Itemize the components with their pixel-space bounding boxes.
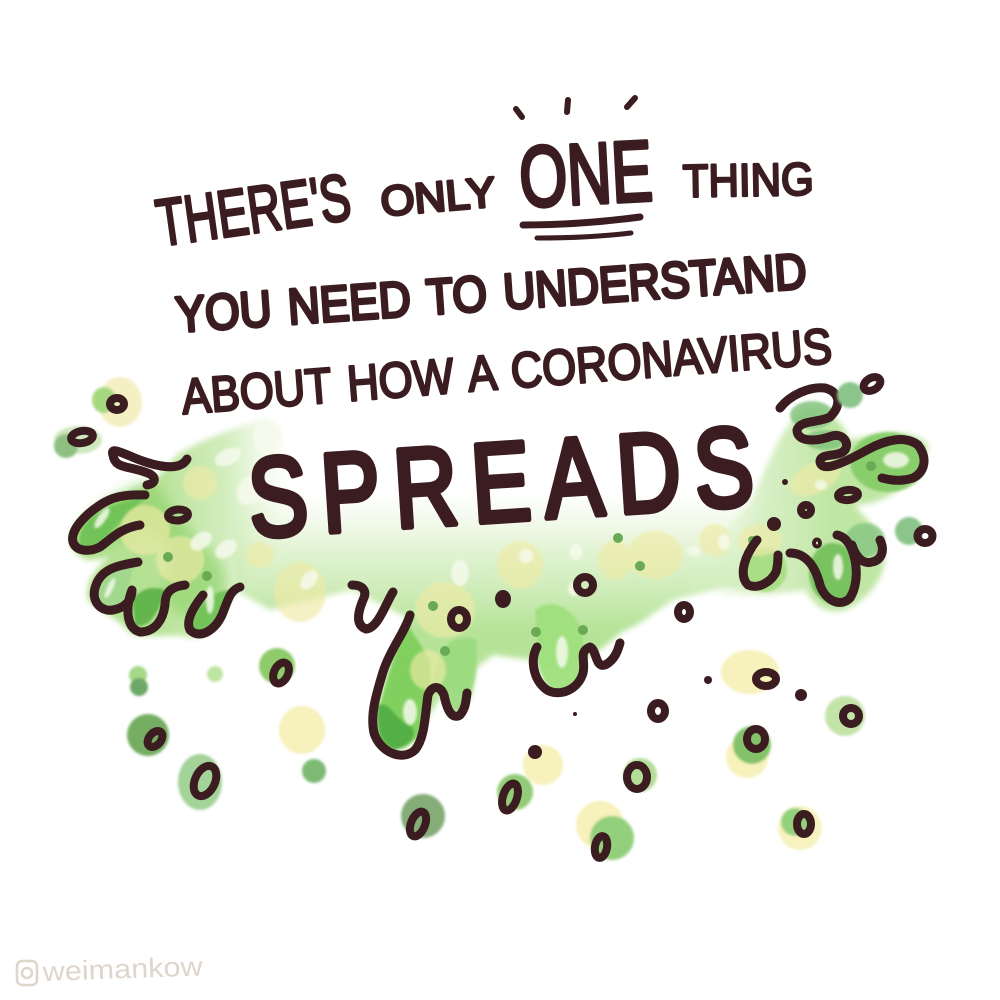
yellow light patches: [120, 453, 846, 690]
emphasis ticks: [516, 98, 635, 117]
title word: SPREADS: SPREADS: [245, 405, 757, 561]
white highlights: [92, 419, 909, 725]
hand-lettered title: [152, 123, 834, 561]
small green specks: [163, 461, 876, 656]
title line: you need to understand: YOU NEED TO UNDERSTAND: [174, 243, 808, 343]
drip fills: [79, 497, 583, 750]
droplet solid dots: [528, 479, 807, 759]
droplet wash colours: [54, 377, 923, 860]
watermark: [17, 951, 204, 987]
title word: THING: THING: [682, 153, 814, 207]
title line: about how a coronavirus: ABOUT HOW A CORONAVIRUS: [179, 318, 834, 425]
droplets cluster: [54, 374, 932, 860]
slime outlines and drips: [73, 388, 924, 755]
right wash: [690, 407, 928, 611]
central band: [230, 470, 790, 750]
underline under ONE: [523, 217, 640, 238]
title word: ONLY: ONLY: [379, 168, 497, 225]
handle: weimankow: [41, 951, 204, 987]
title word: THERE'S: THERE'S: [152, 159, 355, 260]
title word: ONE: ONE: [517, 123, 655, 226]
left wash: [71, 418, 295, 638]
green splatter wash: [71, 401, 928, 750]
droplet rings: [70, 374, 932, 859]
instagram icon: [17, 961, 37, 985]
